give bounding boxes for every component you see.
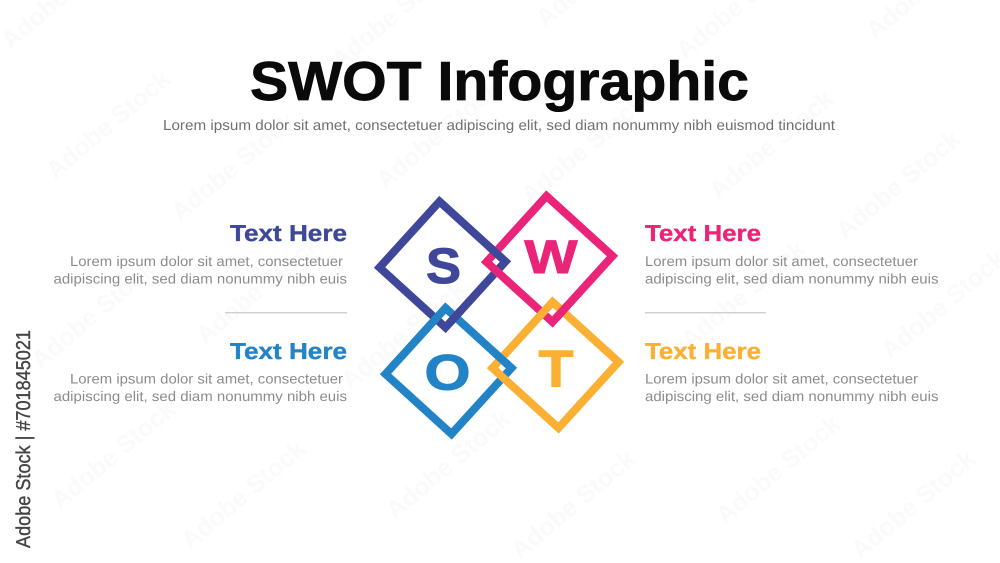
body: strengths: adipiscing elit, sed diam nonummy nibh euis [54,270,347,286]
background watermark pattern: Adobe Stock [516,90,651,210]
stock credit vertical text: Adobe Stock | #701845021 [13,330,35,548]
panel: threats text [645,338,938,404]
heading: threats: Text Here [645,338,761,364]
heading: opportunities: Text Here [230,338,347,364]
heading: strengths: Text Here [230,220,347,246]
background watermark pattern: Adobe Stock [191,230,326,350]
body: threats [645,370,938,404]
diamond W: W [524,230,578,283]
diamond S: S [426,238,461,294]
background watermark pattern: Adobe Stock [846,445,981,563]
body: strengths: Lorem ipsum dolor sit amet, consectetuer [70,253,343,269]
diamond O: O [424,344,470,400]
background watermark pattern: Adobe Stock [371,75,506,195]
title: SWOT Infographic [250,50,749,112]
body: weaknesses: adipiscing elit, sed diam nonummy nibh euis [645,270,938,286]
background watermark pattern: Adobe Stock [176,435,311,555]
background watermark pattern: Adobe Stock [26,255,161,375]
background watermark pattern: Adobe Stock [676,235,811,355]
body: opportunities: Lorem ipsum dolor sit amet, consectetuer [70,370,343,386]
heading: weaknesses: Text Here [645,220,761,246]
background watermark pattern: Adobe Stock [711,410,846,530]
body: weaknesses [645,253,938,286]
background watermark pattern: Adobe Stock [506,445,641,563]
panel: weaknesses text [645,220,938,286]
background watermark pattern: Adobe Stock [704,85,839,205]
body: strengths [54,253,347,286]
panel: opportunities text [54,338,347,404]
background watermark pattern: Adobe Stock [41,65,176,185]
background watermark pattern: Adobe Stock [166,107,301,227]
body: opportunities: adipiscing elit, sed diam nonummy nibh euis [54,388,347,404]
body: threats: Lorem ipsum dolor sit amet, consectetuer [645,370,918,386]
diamond O [386,308,512,434]
body: threats: adipiscing elit, sed diam nonummy nibh euis [645,388,938,404]
diamond T: T [538,340,574,398]
background watermark pattern: Adobe Stock [381,405,516,525]
diamond T [492,302,618,428]
diamond W [486,196,612,322]
body: weaknesses: Lorem ipsum dolor sit amet, consectetuer [645,253,918,269]
background watermark pattern: Adobe Stock [46,395,181,515]
SWOT interlocking diamonds [380,196,618,434]
background watermark pattern: Adobe Stock [831,125,966,245]
diamond S [380,202,506,328]
subtitle: Lorem ipsum dolor sit amet, consectetuer adipiscing elit, sed diam nonummy nibh euismod tincidunt [163,118,835,134]
panel: strengths text [54,220,347,286]
background watermark pattern: Adobe Stock [336,275,471,395]
body: opportunities [54,370,347,404]
